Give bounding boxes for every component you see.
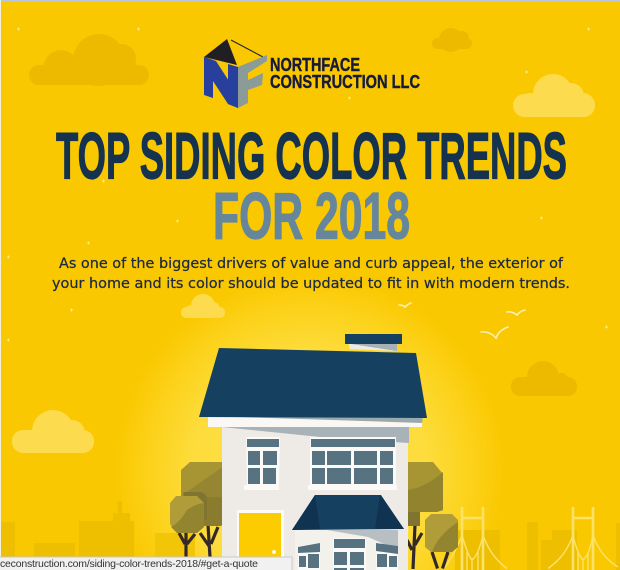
logo: F block [238,55,267,108]
tree: left [170,462,224,557]
window: upper left [244,437,280,490]
skyline right [455,522,620,570]
door [237,510,284,570]
window: upper right [308,437,397,490]
intro paragraph: your home and its color should be updated to fit in with modern trends. [52,276,570,292]
bridges [444,507,618,570]
logo text [270,55,420,92]
logo text: NORTHFACE [270,55,360,75]
logo [204,39,267,108]
cloud: right middle dark [511,361,577,396]
logo: N block [204,57,238,108]
browser status bar: ceconstruction.com/siding-color-trends-2018/#get-a-quote [0,558,258,570]
skyline left [1,501,195,557]
birds [399,303,525,338]
logo text: CONSTRUCTION LLC [270,72,420,92]
bay roof [292,495,404,530]
cloud: top left dark [29,34,149,86]
intro paragraph: As one of the biggest drivers of value and curb appeal, the exterior of [59,256,564,272]
walls [222,426,408,570]
house [199,334,427,570]
logo: roof [204,39,237,65]
chimney [349,344,397,351]
cloud: top right small dark [432,28,472,52]
main roof [199,348,427,418]
stars [7,28,608,342]
intro paragraph [52,256,570,292]
bay window [292,495,404,570]
eave [208,417,422,427]
cloud: top right light [513,74,595,117]
tree: right [407,462,458,569]
subtitle year: FOR 2018 [213,178,410,252]
cloud: small near house [181,294,225,318]
cloud: left lower light [12,410,94,453]
